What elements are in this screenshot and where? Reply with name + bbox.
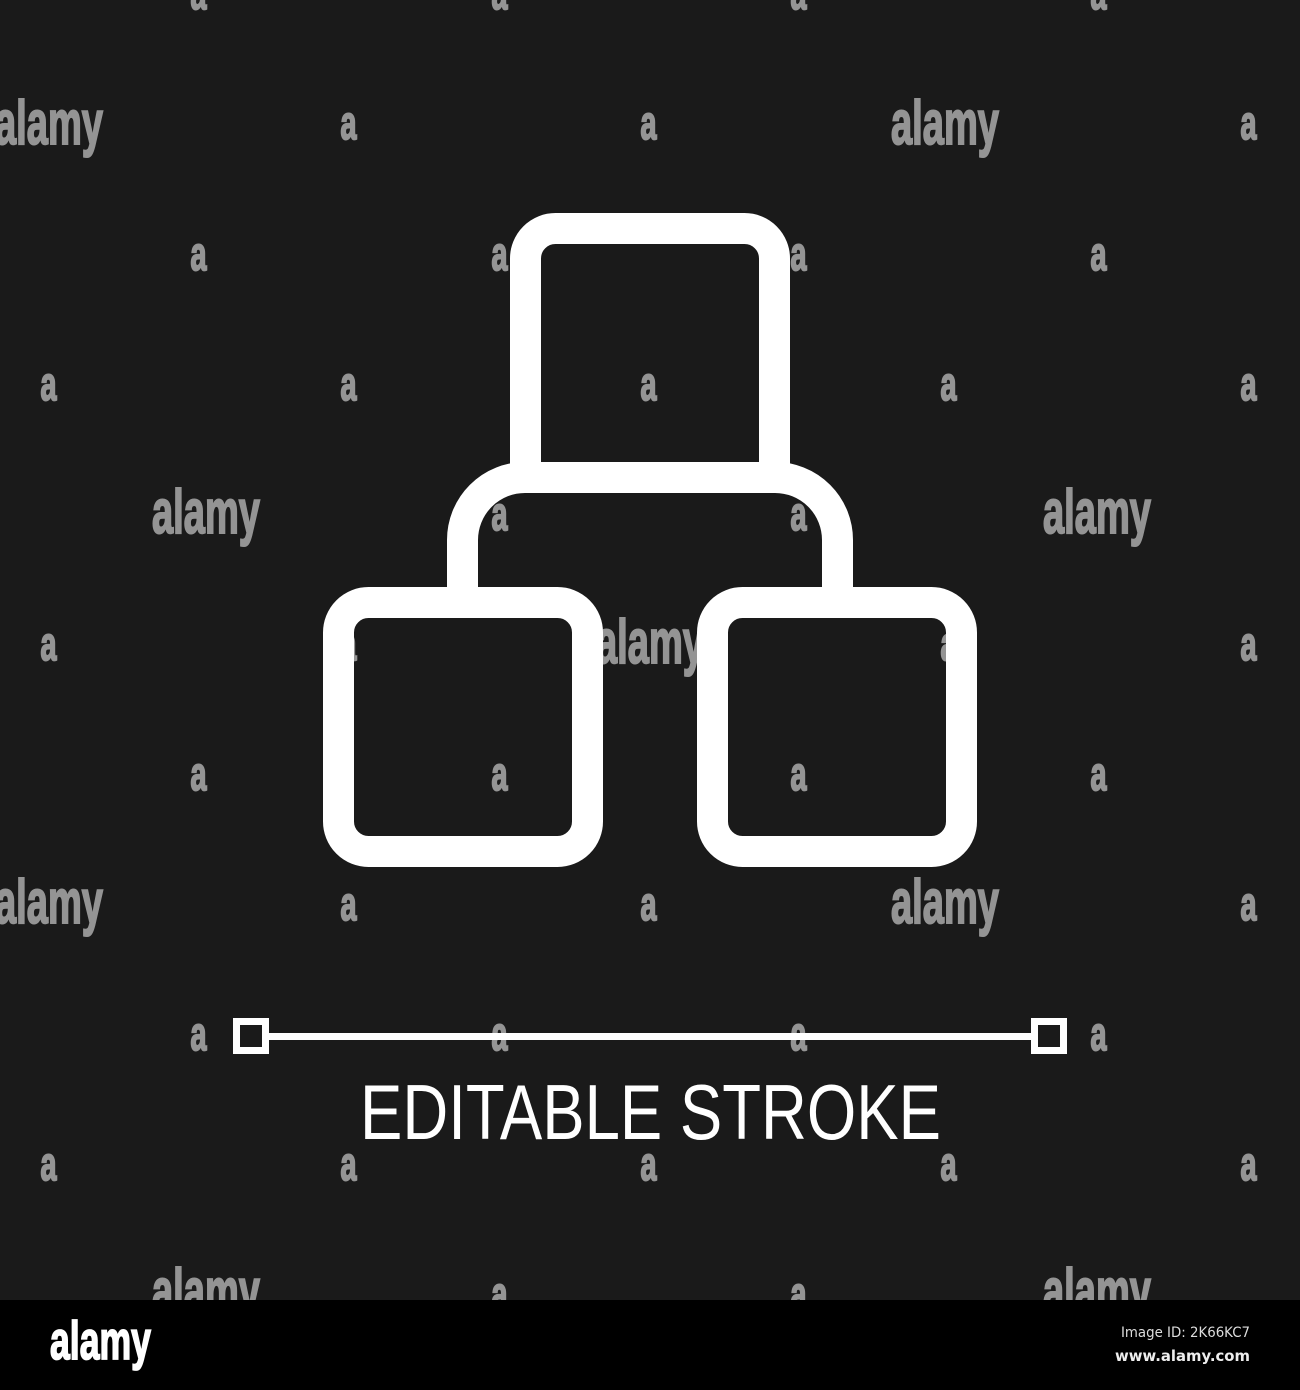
watermark pattern: a bbox=[492, 487, 508, 540]
right handle bbox=[1034, 1022, 1064, 1050]
bottom right block bbox=[712, 602, 962, 852]
watermark pattern: a bbox=[1090, 227, 1107, 280]
watermark pattern: alamy bbox=[891, 868, 999, 937]
top block bbox=[526, 228, 774, 478]
watermark pattern: a bbox=[340, 617, 357, 670]
watermark pattern: a bbox=[790, 1007, 807, 1060]
watermark pattern: a bbox=[940, 357, 957, 410]
bottom left block bbox=[338, 602, 588, 852]
footer logo: alamy bbox=[50, 1311, 151, 1371]
watermark pattern: a bbox=[1090, 747, 1107, 800]
slider line bbox=[269, 1033, 1031, 1040]
watermark pattern: a bbox=[790, 1267, 807, 1320]
watermark pattern: a bbox=[640, 877, 657, 930]
watermark pattern: a bbox=[492, 227, 508, 280]
watermark pattern: a bbox=[340, 877, 357, 930]
watermark pattern: a bbox=[340, 357, 357, 410]
watermark pattern: a bbox=[40, 1137, 57, 1190]
watermark pattern: a bbox=[940, 1137, 957, 1190]
watermark pattern: a bbox=[640, 1137, 657, 1190]
stroke width slider bbox=[236, 1022, 1064, 1050]
watermark pattern: alamy bbox=[1043, 1257, 1151, 1326]
editable stroke caption: EDITABLE STROKE bbox=[360, 1068, 941, 1156]
watermark pattern: a bbox=[790, 227, 807, 280]
watermark pattern: alamy bbox=[0, 89, 103, 158]
watermark pattern: a bbox=[940, 617, 957, 670]
watermark pattern: a bbox=[492, 1267, 508, 1320]
watermark pattern: a bbox=[640, 96, 657, 149]
watermark pattern: a bbox=[492, 1007, 508, 1060]
watermark pattern: a bbox=[190, 227, 207, 280]
watermark pattern: alamy bbox=[0, 868, 103, 937]
watermark pattern: a bbox=[1240, 877, 1257, 930]
connector arc bbox=[462, 478, 838, 602]
watermark pattern: a bbox=[1240, 617, 1257, 670]
watermark pattern: a bbox=[340, 96, 357, 149]
watermark pattern: a bbox=[1240, 357, 1257, 410]
watermark pattern: a bbox=[1240, 1137, 1257, 1190]
watermark pattern: a bbox=[492, 747, 508, 800]
watermark pattern: a bbox=[1240, 96, 1257, 149]
watermark pattern: a bbox=[190, 747, 207, 800]
left handle bbox=[236, 1022, 266, 1050]
footer bar bbox=[0, 1300, 1300, 1390]
image id: Image ID: 2K66KC7 bbox=[1121, 1325, 1250, 1341]
watermark pattern: a bbox=[340, 1137, 357, 1190]
watermark pattern: a bbox=[1090, 1007, 1107, 1060]
watermark pattern: alamy bbox=[596, 608, 704, 677]
watermark pattern: a bbox=[40, 617, 57, 670]
watermark pattern: a bbox=[790, 747, 807, 800]
watermark pattern: alamy bbox=[891, 89, 999, 158]
website: www.alamy.com bbox=[1115, 1347, 1250, 1365]
icon: hierarchy of three blocks bbox=[338, 228, 962, 852]
watermark pattern: alamy bbox=[152, 478, 260, 547]
watermark pattern: a bbox=[640, 357, 657, 410]
watermark pattern: a bbox=[40, 357, 57, 410]
watermark pattern: a bbox=[790, 487, 807, 540]
watermark pattern: a bbox=[190, 1007, 207, 1060]
watermark pattern: alamy bbox=[152, 1257, 260, 1326]
watermark pattern: alamy bbox=[1043, 478, 1151, 547]
